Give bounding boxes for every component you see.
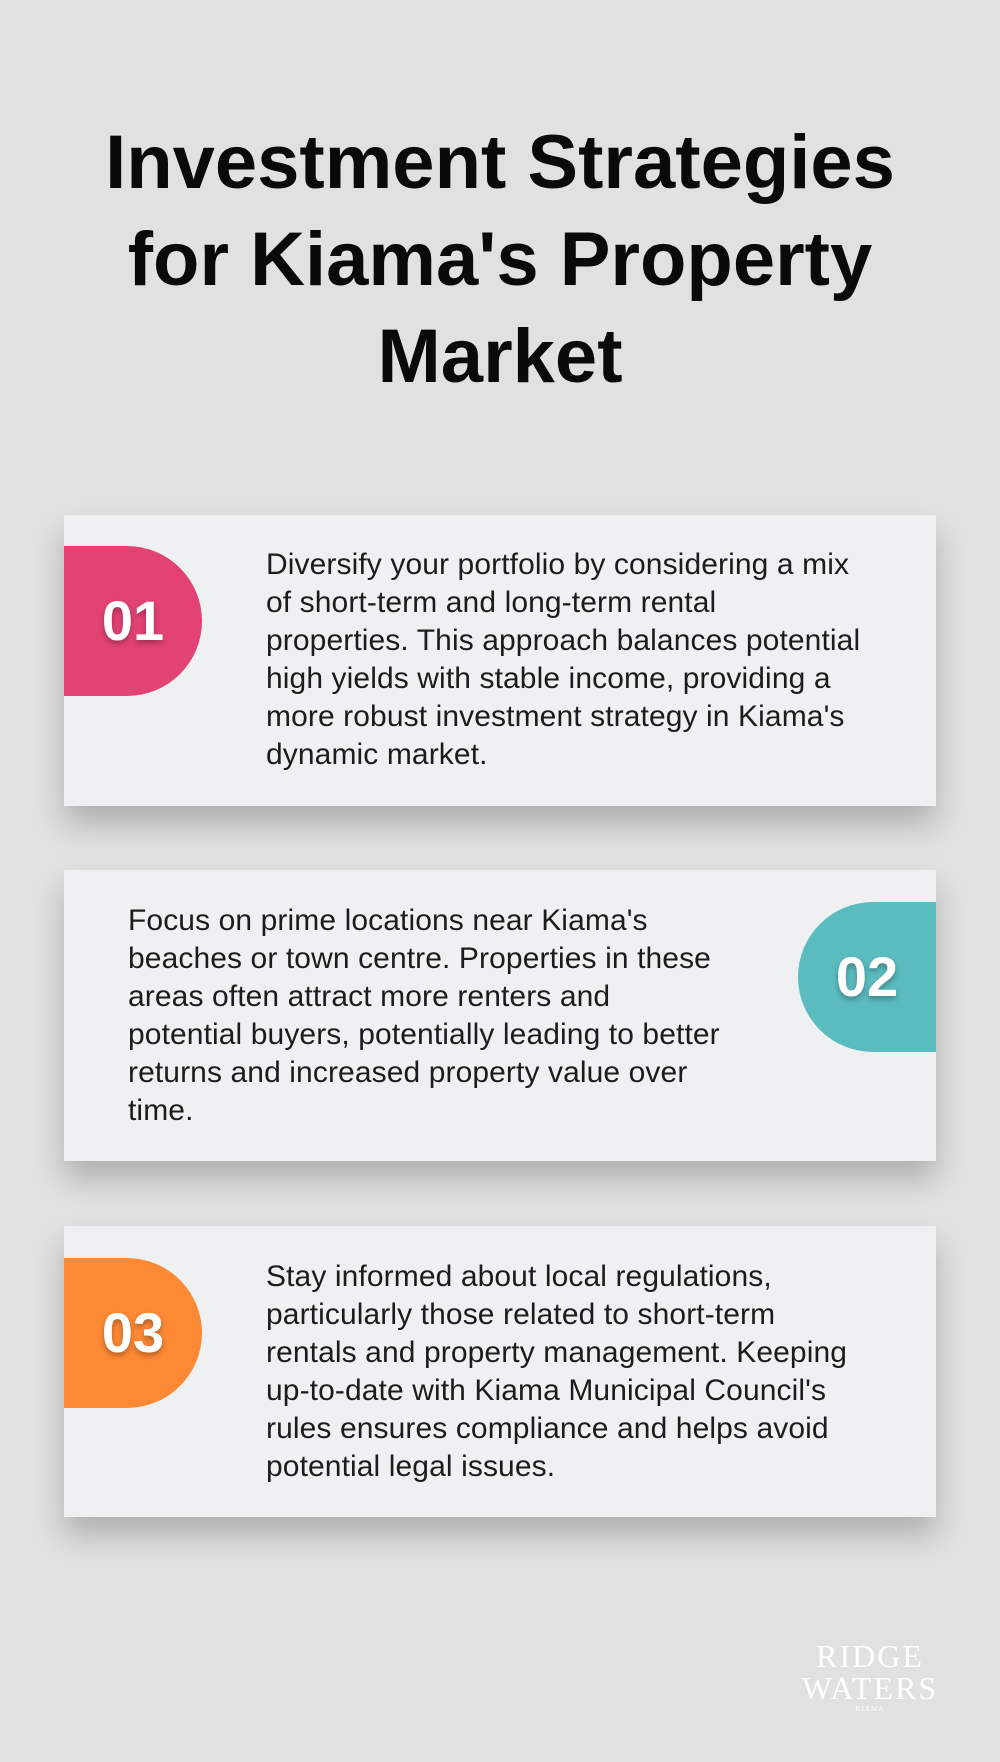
logo: RIDGE [816, 1638, 924, 1674]
title: for Kiama's Property [128, 217, 872, 302]
text 01: more robust investment strategy in Kiama's [266, 700, 844, 733]
text 01: properties. This approach balances potential [266, 624, 860, 657]
text 02: Focus on prime locations near Kiama's [128, 904, 648, 937]
badge 02 [798, 902, 936, 1052]
badge 01 [64, 546, 202, 696]
text 03: rules ensures compliance and helps avoid [266, 1412, 829, 1445]
text 03: Stay informed about local regulations, [266, 1260, 772, 1293]
text 02: time. [128, 1094, 194, 1127]
title: Investment Strategies [105, 120, 895, 205]
panel: strategy 02 [64, 870, 936, 1161]
logo [802, 1638, 938, 1713]
badge 03 [64, 1258, 202, 1408]
text 01: dynamic market. [266, 738, 488, 771]
text 01: of short-term and long-term rental [266, 586, 716, 619]
text 02: returns and increased property value over [128, 1056, 687, 1089]
logo: WATERS [802, 1670, 938, 1706]
text 03: rentals and property management. Keeping [266, 1336, 847, 1369]
logo: KIAMA [856, 1705, 884, 1713]
text 02: beaches or town centre. Properties in these [128, 942, 711, 975]
badge 01: 01 [102, 589, 164, 652]
text 02: areas often attract more renters and [128, 980, 610, 1013]
text 03: particularly those related to short-term [266, 1298, 775, 1331]
panel: strategy 03 [64, 1226, 936, 1517]
title [105, 120, 895, 399]
text 01 [266, 548, 860, 771]
text 01: high yields with stable income, providing a [266, 662, 831, 695]
badge 02: 02 [836, 945, 898, 1008]
badge 03: 03 [102, 1301, 164, 1364]
title: Market [378, 314, 622, 399]
text 02 [128, 904, 720, 1127]
text 03: up-to-date with Kiama Municipal Council's [266, 1374, 826, 1407]
text 02: potential buyers, potentially leading to better [128, 1018, 720, 1051]
text 03 [266, 1260, 847, 1483]
text 03: potential legal issues. [266, 1450, 555, 1483]
panel: strategy 01 [64, 515, 936, 806]
text 01: Diversify your portfolio by considering a mix [266, 548, 849, 581]
